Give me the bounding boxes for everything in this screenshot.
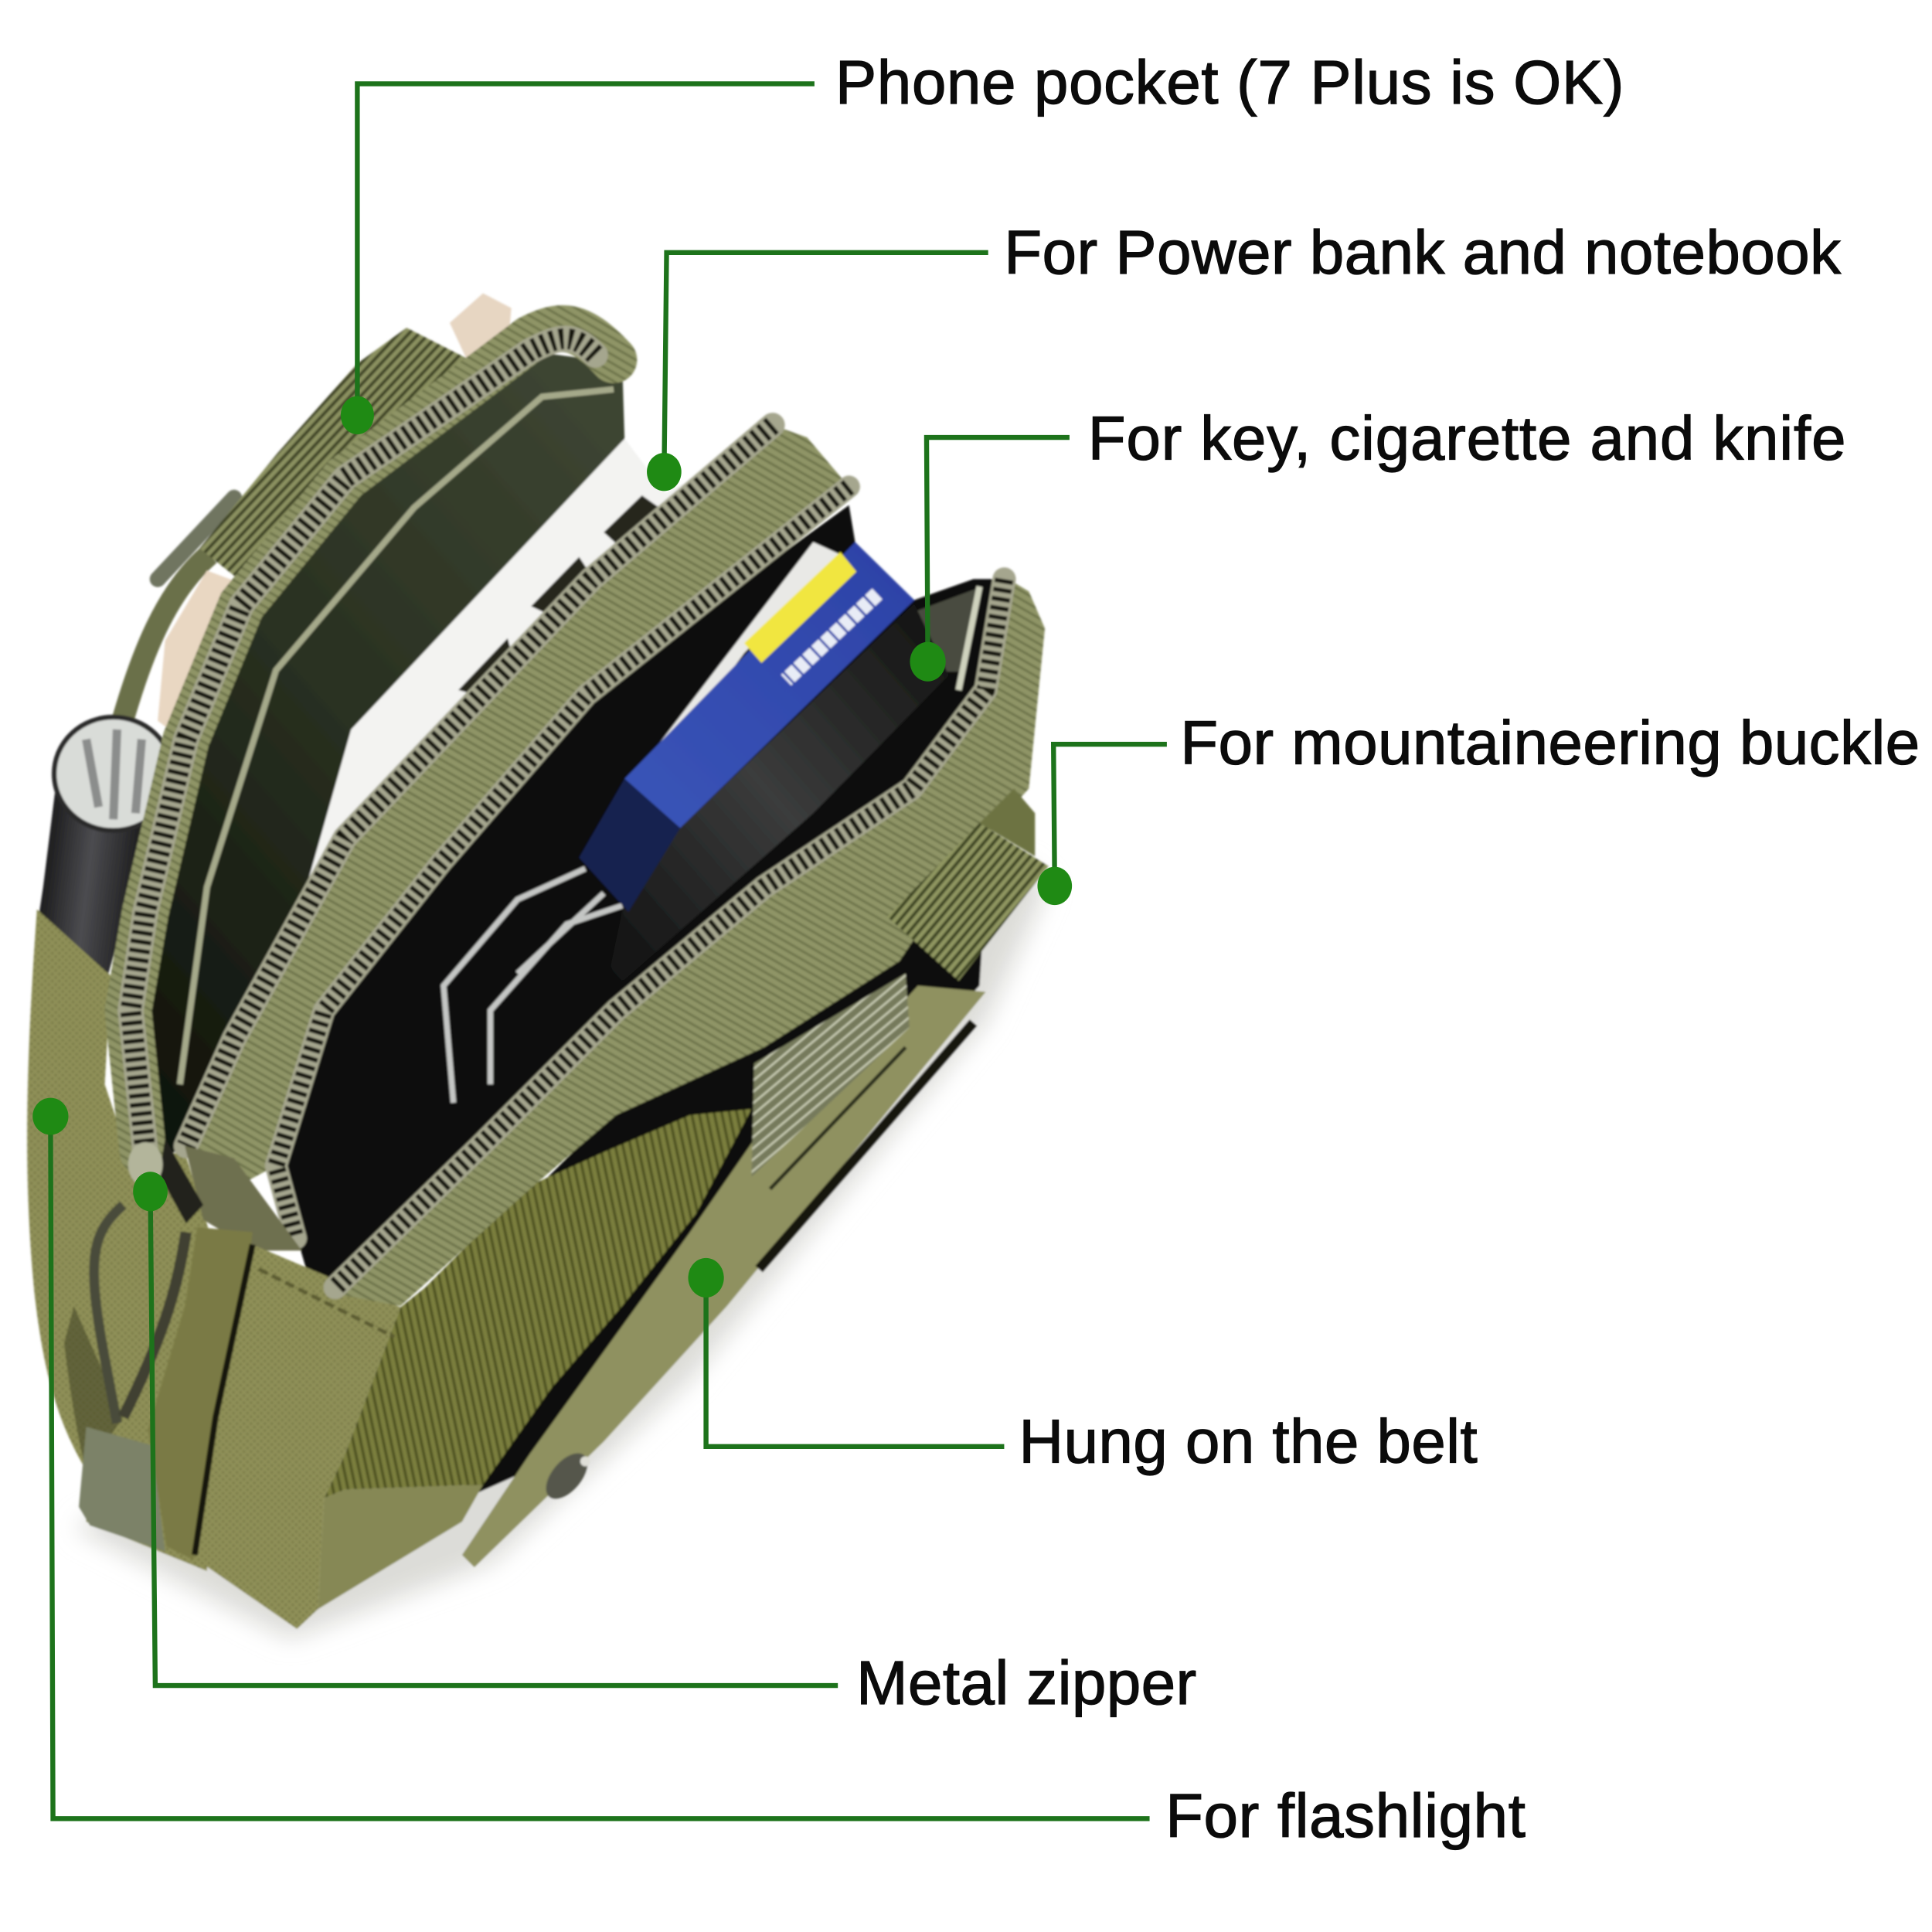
interior of front compartments xyxy=(276,505,1004,1287)
white print marks on box xyxy=(786,594,877,680)
dark inner pocket xyxy=(910,589,976,672)
side loop xyxy=(121,554,209,727)
strap slit xyxy=(770,1047,906,1189)
left flap beside corner xyxy=(148,1227,253,1560)
strap black edge xyxy=(759,1022,974,1269)
hanging belt strap and rear panel xyxy=(462,887,986,1567)
yellow stripe xyxy=(744,552,856,663)
main back pocket with lining xyxy=(128,328,624,1152)
loop strap xyxy=(887,823,1049,981)
callout: mountaineering buckle: For mountaineering buckle xyxy=(1180,709,1920,777)
middle double zipper bands xyxy=(186,425,849,1238)
zipper puller tab xyxy=(159,1138,203,1223)
callout: hung on the belt xyxy=(688,1258,1478,1476)
callout: mountaineering buckle xyxy=(1037,709,1920,905)
second middle zipper xyxy=(276,487,849,1238)
zipper pull head xyxy=(128,1142,162,1186)
front flap fabric xyxy=(335,577,1045,1306)
power bank slots xyxy=(604,495,663,545)
callout: flashlight xyxy=(32,1098,1526,1850)
mountaineering loop xyxy=(887,788,1049,981)
phone top xyxy=(450,293,512,377)
loop top behind xyxy=(980,788,1035,856)
callout: phone pocket: Phone pocket (7 Plus is OK) xyxy=(835,48,1624,117)
belt strap xyxy=(462,986,986,1567)
callout: hung on the belt: Hung on the belt xyxy=(1019,1407,1478,1476)
callout: metal zipper xyxy=(133,1172,1196,1717)
strap xyxy=(199,328,469,582)
callout: power bank and notebook: For Power bank and notebook xyxy=(1004,218,1841,287)
callout: flashlight: For flashlight xyxy=(1165,1781,1526,1850)
front panel xyxy=(148,1109,752,1629)
keys xyxy=(444,869,622,1103)
striped webbing panel xyxy=(324,1109,752,1498)
rivet xyxy=(538,1446,596,1506)
soft ground shadow xyxy=(74,862,1047,1639)
third pocket fabric and zipper xyxy=(335,577,1045,1306)
back pocket pale edge xyxy=(180,389,614,1084)
pouch photo illustration xyxy=(27,293,1049,1639)
zipper pull and cord xyxy=(79,1138,203,1551)
callout: key, cigarette and knife xyxy=(910,404,1845,682)
black gap behind flap xyxy=(468,887,986,1497)
cord end tab xyxy=(79,1427,165,1551)
blue box side xyxy=(579,779,680,912)
back pocket fabric band xyxy=(128,328,614,1152)
blue box top face xyxy=(624,543,914,828)
patch under zipper ends xyxy=(185,1146,302,1250)
pale pocket lip xyxy=(958,587,980,690)
black interior xyxy=(276,505,1004,1287)
flashlight pocket and lower left side xyxy=(27,910,209,1571)
phone side xyxy=(158,570,247,740)
callout: key, cigarette and knife: For key, cigarette and knife xyxy=(1088,404,1845,473)
first middle zipper xyxy=(186,425,773,1146)
callout: metal zipper: Metal zipper xyxy=(856,1648,1196,1717)
third pocket zipper xyxy=(335,579,1004,1287)
cord loop xyxy=(94,1205,123,1423)
white area beside box xyxy=(653,543,840,752)
callout: power bank and notebook xyxy=(647,218,1841,491)
wallet xyxy=(604,604,949,998)
back pocket lining xyxy=(131,351,624,1152)
front corner fabric xyxy=(197,1246,400,1629)
button snap xyxy=(158,498,234,579)
back pocket zipper xyxy=(131,338,595,1152)
power bank xyxy=(305,439,740,889)
power bank body xyxy=(305,439,740,889)
flashlight head xyxy=(54,717,172,831)
flashlight body xyxy=(39,788,154,974)
flashlight xyxy=(39,717,172,974)
dark seam xyxy=(195,1244,253,1555)
lower front panel xyxy=(318,1485,483,1609)
webbing strap on back pocket xyxy=(121,293,512,740)
fabric between zippers xyxy=(186,425,849,1202)
stitch line xyxy=(259,1269,394,1337)
pale inner webbing xyxy=(752,974,910,1177)
callout: phone pocket xyxy=(341,48,1624,434)
blue box xyxy=(579,543,914,912)
